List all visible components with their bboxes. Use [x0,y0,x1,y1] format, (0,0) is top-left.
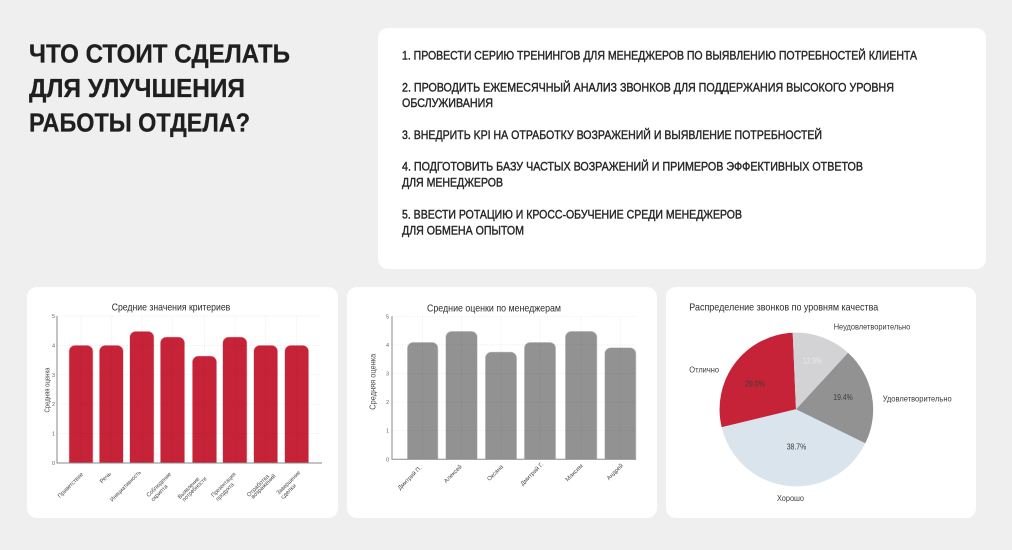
x axis labels: Дмитрий Г. [519,461,545,487]
x axis labels: Приветствие [57,471,85,499]
recommendation 5: 5. ВВЕСТИ РОТАЦИЮ И КРОСС-ОБУЧЕНИЕ СРЕДИ МЕНЕДЖЕРОВ [402,207,742,221]
y axis ticks: 3 [52,373,55,379]
y axis label: Средняя оценка [368,353,378,410]
x axis labels: Соблюдение [146,471,173,499]
recommendation 5 [402,207,742,237]
panel: managers bar chart [347,287,657,518]
y axis ticks: 2 [52,402,55,408]
recommendation 1: 1. ПРОВЕСТИ СЕРИЮ ТРЕНИНГОВ ДЛЯ МЕНЕДЖЕРОВ ПО ВЫЯВЛЕНИЮ ПОТРЕБНОСТЕЙ КЛИЕНТА [402,47,917,62]
y axis ticks: 3 [386,372,389,378]
x axis labels: Речь [99,471,113,485]
bars [407,331,636,459]
bars [69,331,309,463]
x axis labels: Презентация [211,472,237,499]
y axis ticks: 0 [52,461,55,467]
recommendation 4: ДЛЯ МЕНЕДЖЕРОВ [402,176,503,190]
y axis ticks: 5 [52,314,55,320]
chart title: Средние оценки по менеджерам [427,303,561,315]
recommendation 5: ДЛЯ ОБМЕНА ОПЫТОМ [402,223,524,237]
pie percentages: 38.7% [787,442,807,452]
pie percentages: 12.9% [803,356,822,366]
chart title: Средние значения критериев [112,302,231,314]
y axis ticks [386,314,389,463]
recommendation 4: 4. ПОДГОТОВИТЬ БАЗУ ЧАСТЫХ ВОЗРАЖЕНИЙ И ПРИМЕРОВ ЭФФЕКТИВНЫХ ОТВЕТОВ [402,159,863,174]
pie labels: Хорошо [777,493,804,503]
y axis ticks: 4 [386,343,389,349]
x axis labels: Завершение [276,470,303,496]
x axis labels: Андрей [605,462,625,482]
pie percentages [745,356,853,452]
panel: quality pie chart [666,287,976,518]
y axis ticks: 2 [386,400,389,406]
y axis ticks: 0 [386,457,389,463]
y axis ticks: 1 [386,429,389,435]
title: ЧТО СТОИТ СДЕЛАТЬ [29,39,290,69]
y axis ticks: 1 [52,432,55,438]
x axis labels: продукта [215,482,236,503]
x axis labels: Отработка [246,473,271,499]
title: ДЛЯ УЛУЧШЕНИЯ [29,73,245,103]
pie chart [720,333,873,486]
pie percentages: 29.0% [745,378,765,388]
title: РАБОТЫ ОТДЕЛА? [29,108,250,138]
x axis labels: Выявление [177,476,202,501]
recommendation 2 [402,79,894,110]
pie labels: Удовлетворительно [883,393,952,403]
title [29,39,290,138]
panel: criteria bar chart [27,287,338,518]
recommendation 4 [402,159,863,190]
y axis ticks: 4 [52,343,55,349]
pie percentages: 19.4% [833,392,853,402]
pie labels [689,321,952,503]
y axis ticks [52,314,55,467]
x axis labels: скрипта [150,483,170,503]
x axis labels: возражений [250,473,277,500]
recommendation 2: 2. ПРОВОДИТЬ ЕЖЕМЕСЯЧНЫЙ АНАЛИЗ ЗВОНКОВ ДЛЯ ПОДДЕРЖАНИЯ ВЫСОКОГО УРОВНЯ [402,79,894,94]
x axis labels: Дмитрий П. [396,464,424,492]
pie labels: Неудовлетворительно [834,321,911,331]
panel: recommendations [378,28,986,269]
x axis labels: сделки [280,483,298,501]
y axis label: Средняя оценка [44,367,52,412]
recommendation 3: 3. ВНЕДРИТЬ KPI НА ОТРАБОТКУ ВОЗРАЖЕНИЙ И ВЫЯВЛЕНИЕ ПОТРЕБНОСТЕЙ [402,127,822,142]
recommendation 2: ОБСЛУЖИВАНИЯ [402,96,493,110]
x axis labels: Оксана [487,464,505,483]
x axis labels: Алексей [443,463,464,485]
x axis labels: Максим [565,463,585,483]
x axis labels: потребности [182,476,208,503]
chart title: Распределение звонков по уровням качества [689,302,878,314]
y axis ticks: 5 [386,314,389,320]
x axis labels [396,461,625,492]
x axis labels: Инициативность [109,470,143,503]
x axis labels [57,470,303,503]
pie labels: Отлично [689,364,719,374]
